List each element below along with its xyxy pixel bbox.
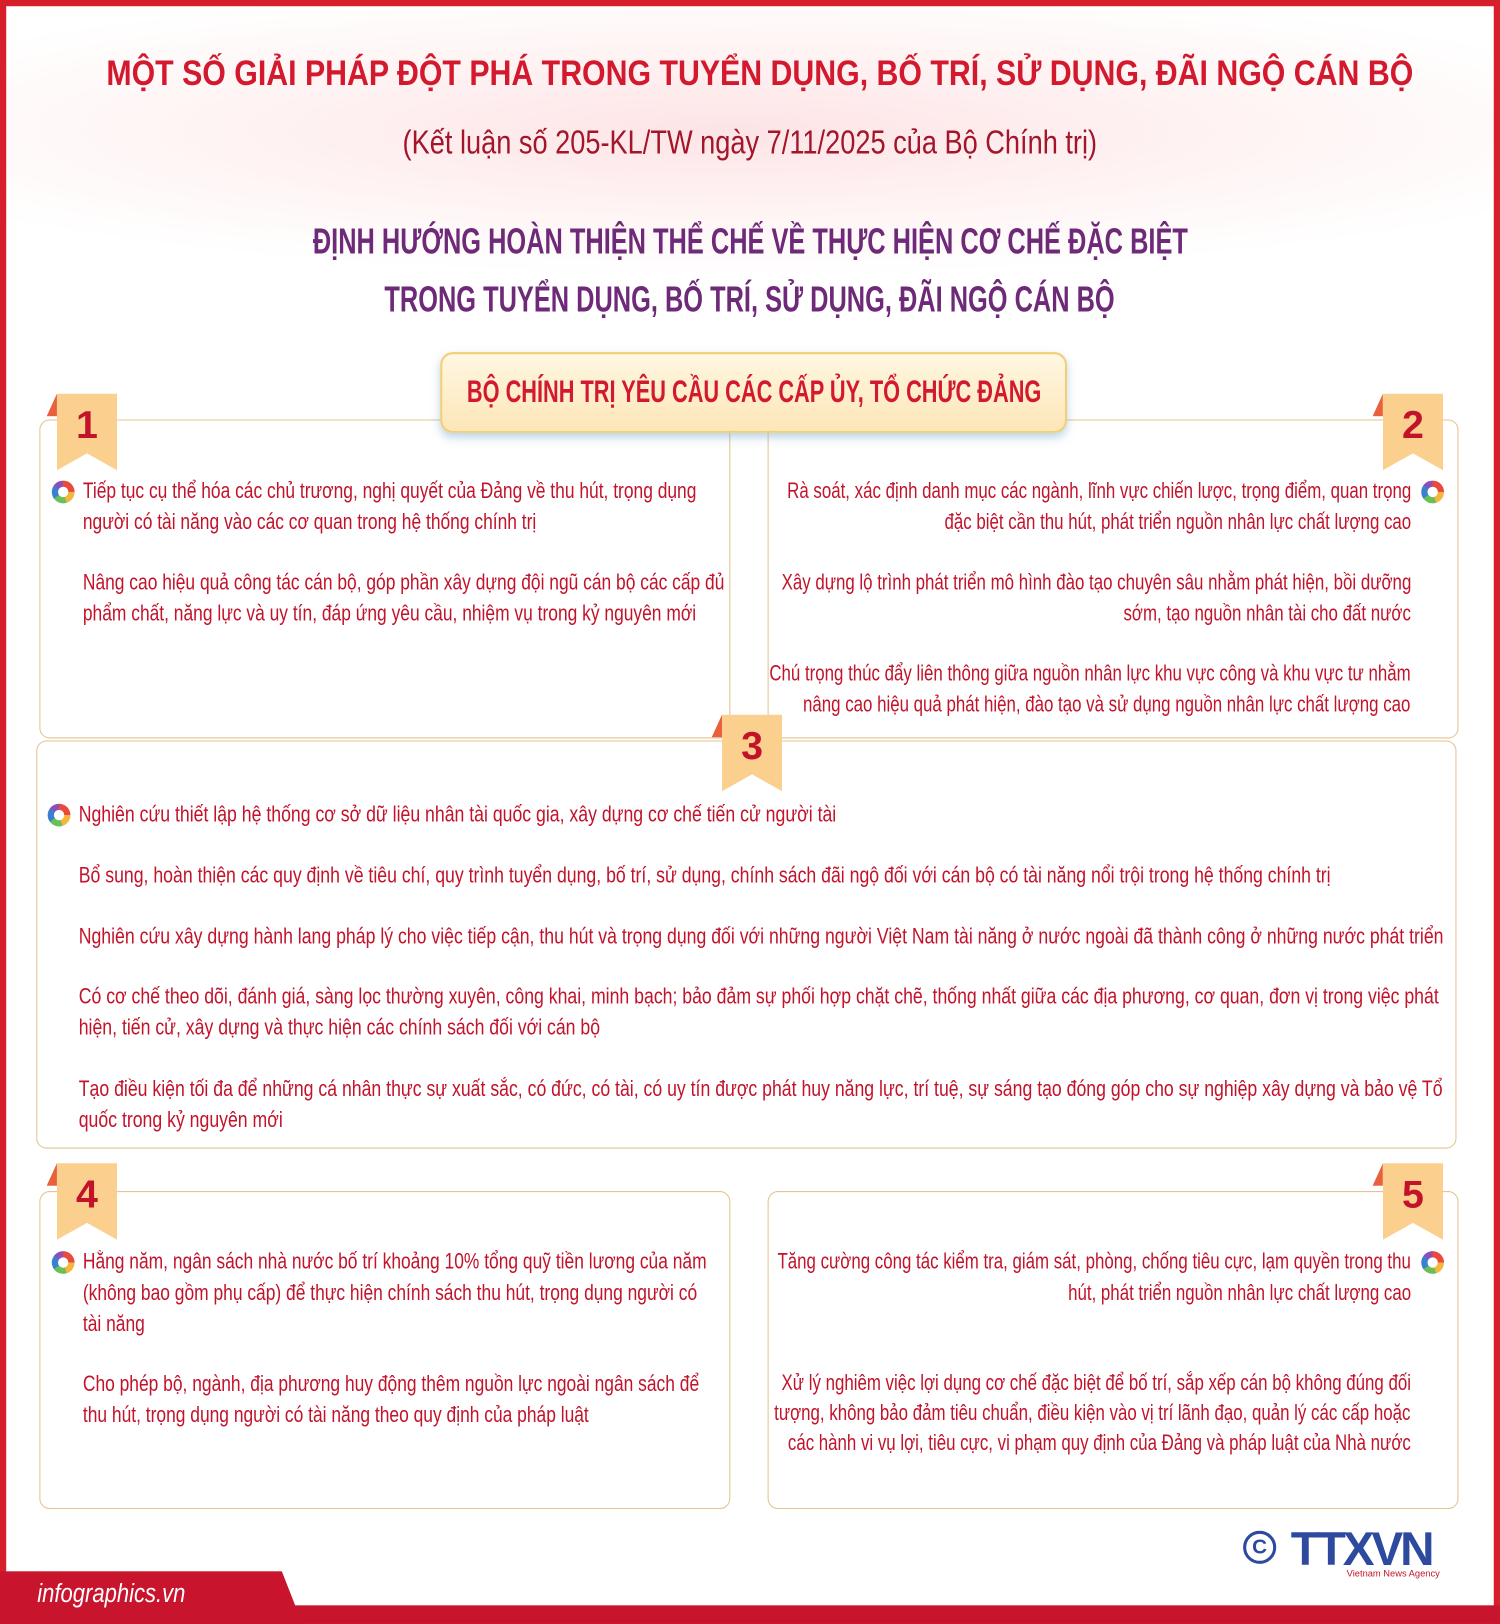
panel: 4 — [39, 1191, 730, 1509]
text: panel 2: Chú trọng thúc đẩy liên thông giữa nguồn nhân lực khu vực công và khu vực tư nhằm — [770, 662, 1411, 686]
text: panel 1: Tiếp tục cụ thể hóa các chủ trương, nghị quyết của Đảng về thu hút, trọng dụng — [83, 480, 696, 503]
footer: infographics.vn — [37, 1579, 185, 1608]
text: panel 3: hiện, tiến cử, xây dựng và thực hiện các chính sách đối với cán bộ — [79, 1016, 600, 1040]
ribbon 2 — [1372, 394, 1443, 470]
text: panel 3: Tạo điều kiện tối đa để những cá nhân thực sự xuất sắc, có đức, có tài, có uy tín được phát huy năng lực, trí tuệ, sự sáng tạo đóng góp cho sự nghiệp xây dựng và bảo vệ Tổ — [79, 1077, 1443, 1101]
banner: BỘ CHÍNH TRỊ YÊU CẦU CÁC CẤP ỦY, TỔ CHỨC ĐẢNG — [466, 375, 1041, 409]
ribbon 2: 2 — [1402, 404, 1424, 447]
text: panel 4: thu hút, trọng dụng người có tài năng theo quy định của pháp luật — [83, 1403, 589, 1427]
icon: bullet 2 — [1421, 481, 1444, 503]
ribbon 5 — [1372, 1163, 1443, 1240]
text: panel 3: Nghiên cứu xây dựng hành lang pháp lý cho việc tiếp cận, thu hút và trọng dụng đối với những người Việt Nam tài năng ở nước ngoài đã thành công ở những nước phát triển — [79, 925, 1443, 949]
text: panel 5: Xử lý nghiêm việc lợi dụng cơ chế đặc biệt để bố trí, sắp xếp cán bộ không đúng đối — [781, 1371, 1411, 1395]
text: panel 3: quốc trong kỷ nguyên mới — [79, 1108, 283, 1132]
title: MỘT SỐ GIẢI PHÁP ĐỘT PHÁ TRONG TUYỂN DỤNG, BỐ TRÍ, SỬ DỤNG, ĐÃI NGỘ CÁN BỘ — [106, 54, 1413, 93]
ribbon 1: 1 — [76, 404, 98, 447]
icon: bullet 3 — [48, 804, 70, 826]
panel: 2 — [768, 419, 1459, 738]
panel: 3 — [36, 741, 1456, 1149]
text: panel 4: (không bao gồm phụ cấp) để thực hiện chính sách thu hút, trọng dụng người có — [83, 1281, 697, 1305]
text: panel 5: Tăng cường công tác kiểm tra, giám sát, phòng, chống tiêu cực, lạm quyền trong thu — [777, 1250, 1411, 1274]
icon: bullet 1 — [52, 481, 75, 503]
ribbon 3 — [712, 714, 782, 791]
text: panel 3: Bổ sung, hoàn thiện các quy định về tiêu chí, quy trình tuyển dụng, bố trí, sử dụng, chính sách đãi ngộ đối với cán bộ có tài năng nổi trội trong hệ thống chính trị — [79, 864, 1331, 888]
text: panel 4: Cho phép bộ, ngành, địa phương huy động thêm nguồn lực ngoài ngân sách để — [83, 1372, 699, 1396]
text: panel 4 — [83, 1250, 707, 1427]
footer — [0, 1571, 1500, 1624]
ribbon 5: 5 — [1402, 1173, 1424, 1217]
text: panel 5 — [774, 1250, 1411, 1455]
text: panel 2 — [770, 480, 1411, 717]
ribbon 3: 3 — [741, 725, 763, 768]
ribbon 4 — [46, 1163, 117, 1240]
text: panel 5: các hành vi vụ lợi, tiêu cực, vi phạm quy định của Đảng và pháp luật của Nhà nước — [788, 1431, 1411, 1455]
text: panel 4: tài năng — [83, 1312, 145, 1336]
heading: ĐỊNH HƯỚNG HOÀN THIỆN THỂ CHẾ VỀ THỰC HIỆN CƠ CHẾ ĐẶC BIỆT — [312, 222, 1188, 262]
ribbon 1 — [46, 394, 117, 470]
text: panel 5: tượng, không bảo đảm tiêu chuẩn, điều kiện vào vị trí lãnh đạo, quản lý các cấp hoặc — [775, 1401, 1411, 1425]
text: panel 1: Nâng cao hiệu quả công tác cán bộ, góp phần xây dựng đội ngũ cán bộ các cấp đủ — [83, 571, 724, 594]
heading — [312, 221, 1188, 320]
panel: 1 — [39, 419, 730, 738]
ribbon 4: 4 — [76, 1173, 98, 1217]
text: panel 3: Có cơ chế theo dõi, đánh giá, sàng lọc thường xuyên, công khai, minh bạch; bảo đảm sự phối hợp chặt chẽ, thống nhất giữa các địa phương, cơ quan, đơn vị trong việc phát — [79, 985, 1439, 1009]
text: panel 1 — [83, 480, 724, 626]
logo: TTXVN: Vietnam News Agency — [1347, 1568, 1440, 1578]
text: panel 1: phẩm chất, năng lực và uy tín, đáp ứng yêu cầu, nhiệm vụ trong kỷ nguyên mới — [83, 602, 696, 626]
text: panel 4: Hằng năm, ngân sách nhà nước bố trí khoảng 10% tổng quỹ tiền lương của năm — [83, 1250, 707, 1274]
text: panel 2: nâng cao hiệu quả phát hiện, đào tạo và sử dụng nguồn nhân lực chất lượng cao — [804, 693, 1411, 717]
text: panel 1: người có tài năng vào các cơ quan trong hệ thống chính trị — [83, 511, 536, 534]
text: panel 5: hút, phát triển nguồn nhân lực chất lượng cao — [1068, 1281, 1411, 1305]
logo: TTXVN — [1243, 1521, 1440, 1578]
icon: bullet 5 — [1421, 1251, 1444, 1274]
text: panel 2: đặc biệt cần thu hút, phát triển nguồn nhân lực chất lượng cao — [944, 511, 1411, 534]
text: panel 2: Rà soát, xác định danh mục các ngành, lĩnh vực chiến lược, trọng điểm, quan trọng — [787, 480, 1411, 503]
text: panel 2: sớm, tạo nguồn nhân tài cho đất nước — [1123, 602, 1411, 626]
banner — [440, 352, 1067, 433]
panel: 5 — [768, 1191, 1459, 1509]
text: panel 2: Xây dựng lộ trình phát triển mô hình đào tạo chuyên sâu nhằm phát hiện, bồi dưỡng — [781, 571, 1411, 594]
text: panel 3 — [79, 803, 1443, 1132]
text: panel 3: Nghiên cứu thiết lập hệ thống cơ sở dữ liệu nhân tài quốc gia, xây dựng cơ chế tiến cử người tài — [79, 803, 836, 826]
icon: bullet 4 — [52, 1251, 75, 1274]
subtitle: (Kết luận số 205-KL/TW ngày 7/11/2025 của Bộ Chính trị) — [403, 123, 1097, 161]
logo: TTXVN: TTXVN — [1291, 1521, 1431, 1575]
heading: TRONG TUYỂN DỤNG, BỐ TRÍ, SỬ DỤNG, ĐÃI NGỘ CÁN BỘ — [385, 280, 1115, 320]
logo: TTXVN: C — [1252, 1536, 1267, 1559]
